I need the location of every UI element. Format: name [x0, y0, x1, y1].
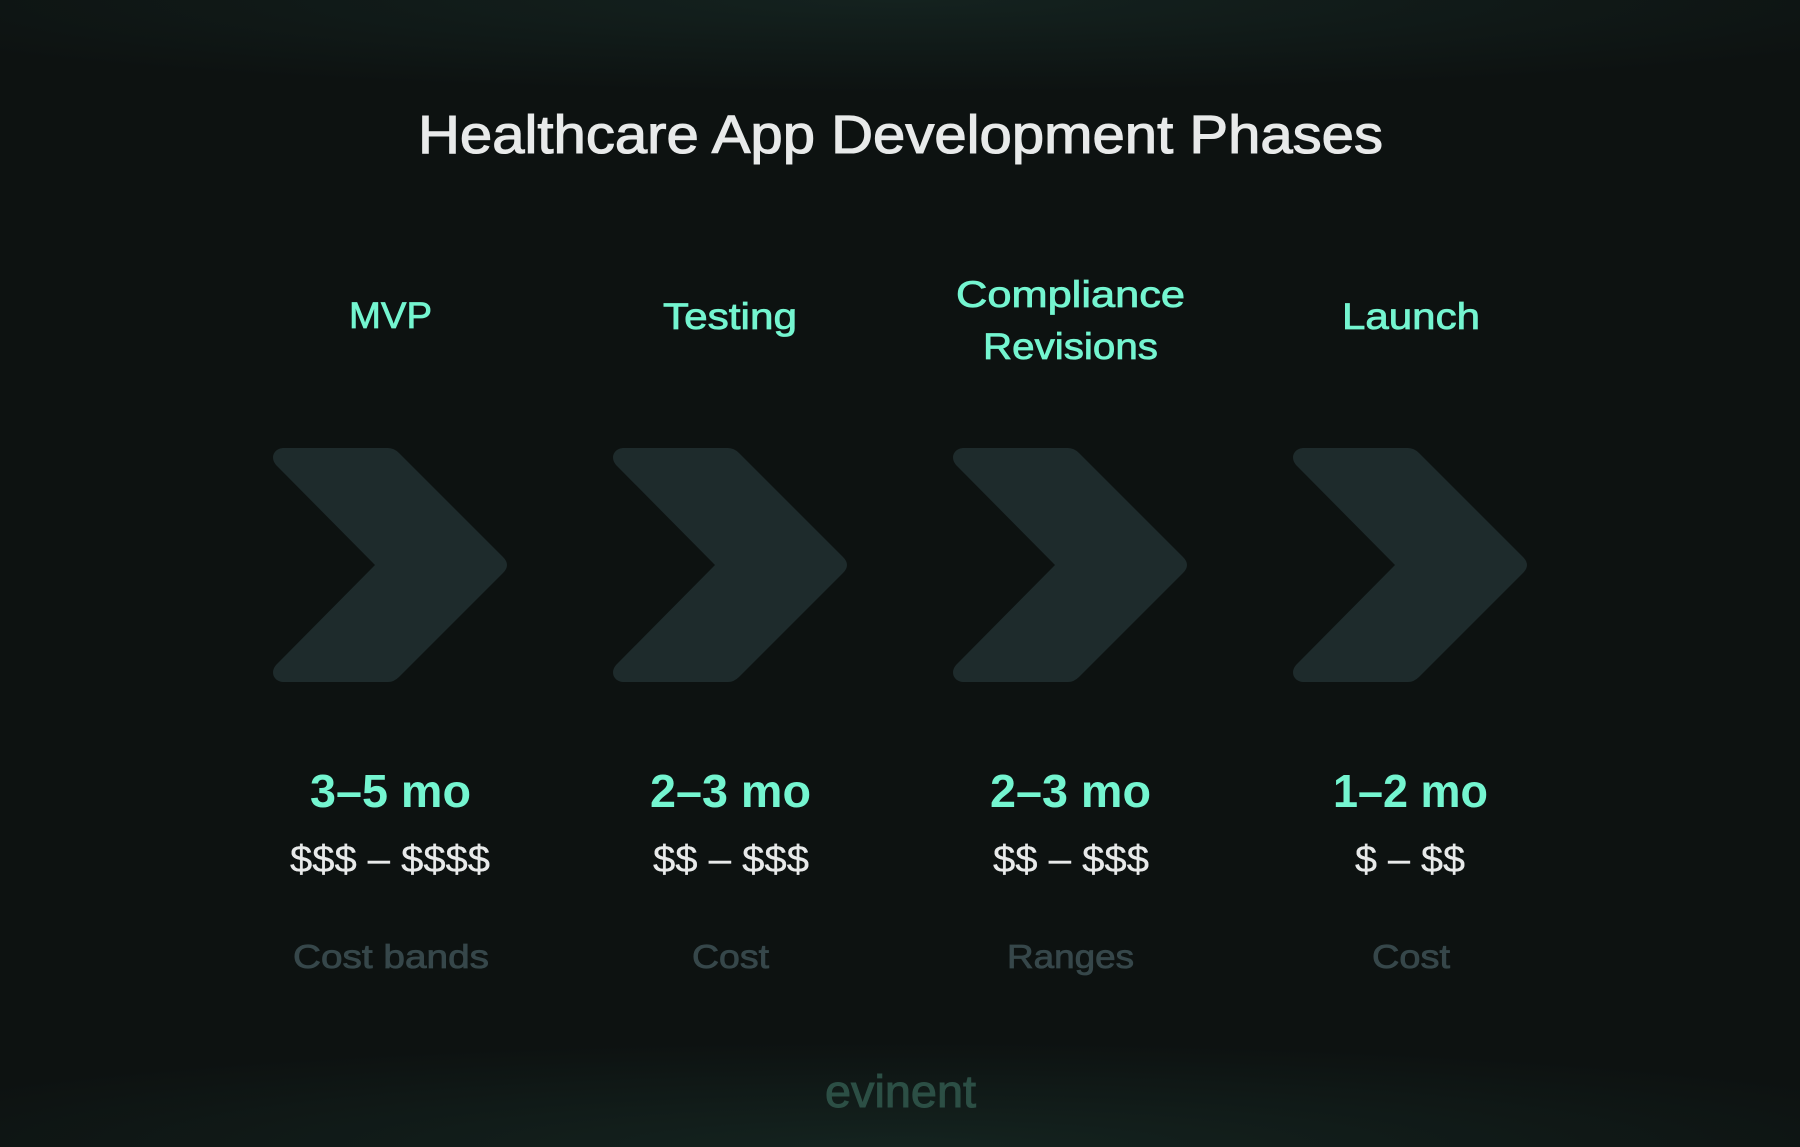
- duration: MVP: 3–5 mo: [310, 765, 471, 817]
- label: MVP: MVP: [349, 295, 432, 336]
- phase column: Testing: [613, 296, 847, 975]
- icon: chevron MVP: [273, 448, 507, 682]
- cost range: MVP: $$$ – $$$$: [290, 839, 490, 881]
- note: Testing: Cost: [692, 938, 769, 975]
- icon: chevron Testing: [613, 448, 847, 682]
- label: Compliance Revisions: Compliance: [956, 274, 1185, 315]
- phase column: Launch: [1293, 296, 1527, 975]
- icon: chevron Compliance Revisions: [953, 448, 1187, 682]
- label: Compliance Revisions: Revisions: [983, 326, 1158, 367]
- logo: evinent: evinent: [825, 1066, 977, 1117]
- note: Launch: Cost: [1372, 938, 1450, 975]
- cost range: Launch: $ – $$: [1355, 839, 1465, 881]
- icon: chevron Launch: [1293, 448, 1527, 682]
- duration: Launch: 1–2 mo: [1333, 765, 1488, 817]
- phase column: Compliance Revisions: [953, 274, 1187, 975]
- phase column: MVP: [273, 295, 507, 975]
- label: Testing: Testing: [663, 296, 797, 337]
- label: Compliance Revisions: [956, 274, 1185, 367]
- duration: Testing: 2–3 mo: [650, 765, 811, 817]
- title: Healthcare App Development Phases: [418, 105, 1383, 165]
- label: Launch: Launch: [1342, 296, 1480, 337]
- duration: Compliance Revisions: 2–3 mo: [990, 765, 1151, 817]
- cost range: Testing: $$ – $$$: [653, 839, 809, 881]
- cost range: Compliance Revisions: $$ – $$$: [993, 839, 1149, 881]
- note: Compliance Revisions: Ranges: [1007, 938, 1134, 975]
- note: MVP: Cost bands: [293, 938, 489, 975]
